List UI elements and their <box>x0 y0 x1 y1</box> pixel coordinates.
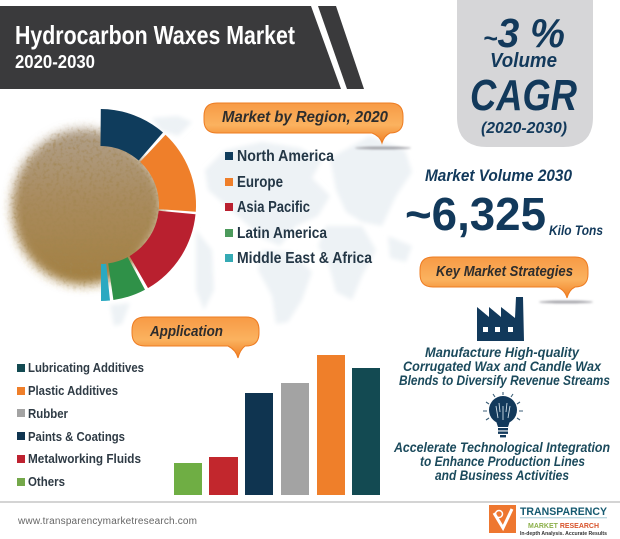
callout: key market strategies <box>420 257 593 303</box>
strategy text 2: and Business Activities <box>435 467 569 483</box>
company logo <box>489 505 608 537</box>
strategy text 1 <box>399 344 610 388</box>
application legend <box>17 360 144 489</box>
header banner <box>0 6 364 89</box>
callout heading: Application <box>149 323 223 340</box>
icon: light bulb <box>483 392 523 437</box>
logo tagline: In-depth Analysis. Accurate Results <box>520 531 607 537</box>
CAGR volume label: Volume <box>490 50 557 72</box>
legend item: Lubricating Additives: Lubricating Additives <box>28 360 144 375</box>
callout heading: Key Market Strategies <box>436 264 573 280</box>
callout heading: Market by Region, 2020 <box>222 109 388 126</box>
segment: Europe <box>140 135 196 212</box>
CAGR label: CAGR <box>470 71 577 120</box>
CAGR value: ~3 % <box>483 10 565 56</box>
legend item: Latin America: Latin America <box>237 225 327 242</box>
market volume stat <box>405 167 603 240</box>
CAGR period: (2020-2030) <box>481 120 567 137</box>
logo name: TRANSPARENCY <box>520 506 608 518</box>
callout: application <box>132 317 259 358</box>
callout: market by region <box>204 103 411 149</box>
bar: Plastic Additives <box>317 355 345 495</box>
legend item: North America: North America <box>237 148 334 165</box>
donut chart: market by region <box>100 109 196 301</box>
stat heading: Market Volume 2030 <box>425 167 573 185</box>
region legend <box>225 148 372 267</box>
stat unit: Kilo Tons <box>549 222 603 238</box>
bar: Paints and Coatings <box>245 393 273 495</box>
bar: Others <box>174 463 202 495</box>
segment: Middle East and Africa <box>101 264 110 301</box>
legend item: Asia Pacific: Asia Pacific <box>237 199 310 216</box>
legend item: Others: Others <box>28 474 65 489</box>
legend item: Plastic Additives: Plastic Additives <box>28 383 118 398</box>
legend item: Paints and Coatings: Paints & Coatings <box>28 429 125 444</box>
strategy text 2: to Enhance Production Lines <box>420 453 585 469</box>
segment: Latin America <box>108 257 145 300</box>
stat value: ~6,325 <box>405 188 546 240</box>
title: Hydrocarbon Waxes Market <box>15 20 295 50</box>
strategy text 2 <box>393 439 610 483</box>
logo mark <box>489 505 516 533</box>
wax photo circle <box>12 129 162 285</box>
bar: Metalworking Fluids <box>209 457 238 495</box>
legend item: Europe: Europe <box>237 174 283 191</box>
legend item: Middle East and Africa: Middle East & Africa <box>237 250 372 267</box>
segment: Asia Pacific <box>130 211 196 288</box>
background world map <box>110 116 412 326</box>
CAGR panel <box>457 0 593 147</box>
legend item: Rubber: Rubber <box>28 406 68 421</box>
strategy text 1: Corrugated Wax and Candle Wax <box>403 358 602 374</box>
legend item: Metalworking Fluids: Metalworking Fluids <box>28 451 141 466</box>
bar: Rubber <box>281 383 309 495</box>
logo subtitle: MARKET RESEARCH <box>528 521 599 530</box>
icon: factory <box>477 297 524 341</box>
bar chart: application <box>174 355 380 495</box>
strategy text 1: Manufacture High-quality <box>425 344 580 360</box>
website url: www.transparencymarketresearch.com <box>17 516 197 527</box>
bar: Lubricating Additives <box>352 368 380 495</box>
segment: North America <box>100 109 163 160</box>
subtitle: 2020-2030 <box>15 52 95 72</box>
